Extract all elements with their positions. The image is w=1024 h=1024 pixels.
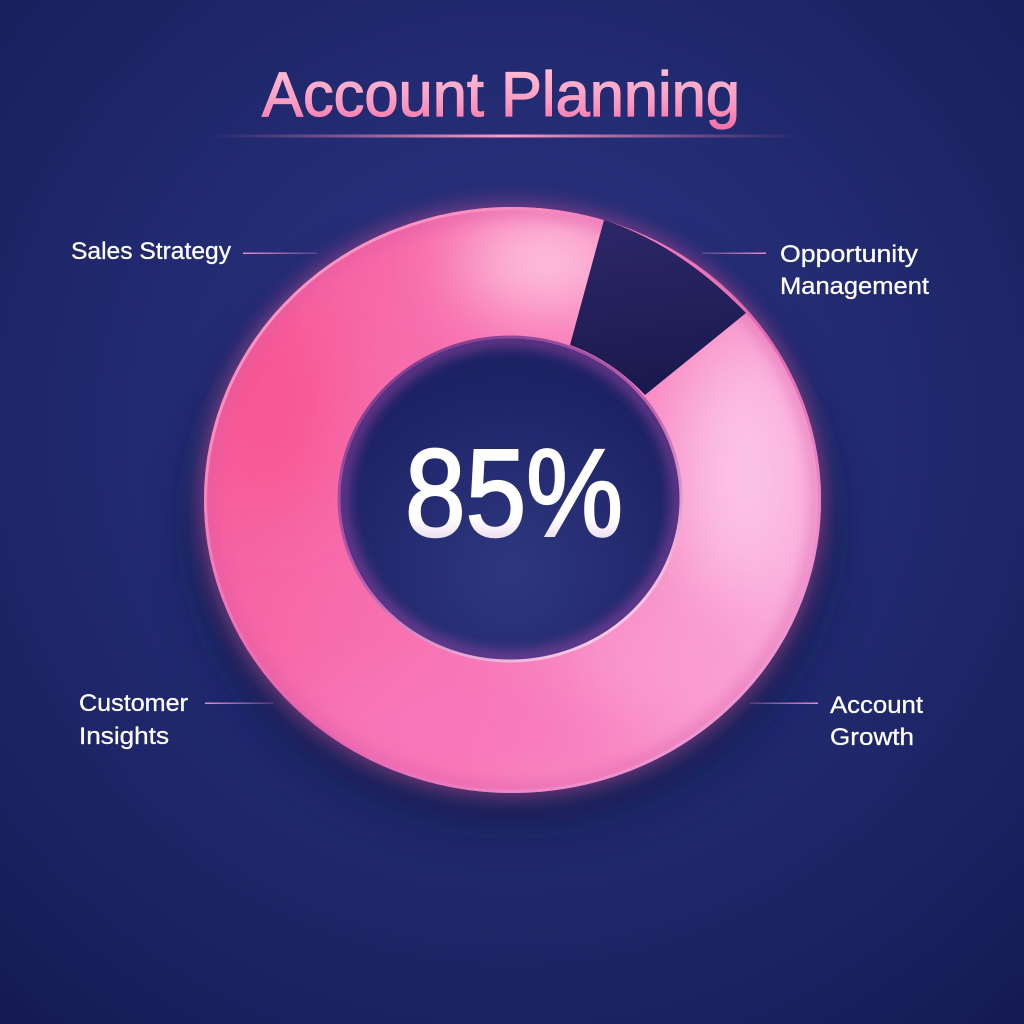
ring edge highlight xyxy=(206,208,820,792)
dark gap segment xyxy=(570,220,746,395)
ring segments xyxy=(204,207,821,793)
label: account growth xyxy=(750,692,923,751)
ring glow xyxy=(200,203,824,797)
label: opportunity management xyxy=(702,241,929,300)
donut chart xyxy=(190,203,834,825)
label: account growth: Account xyxy=(830,692,923,719)
title: Account Planning xyxy=(262,60,740,130)
label: customer insights xyxy=(79,690,273,750)
center hole xyxy=(339,337,681,661)
label: opportunity management: Management xyxy=(780,273,929,300)
ring shadow xyxy=(190,225,834,825)
label: opportunity management: Opportunity xyxy=(780,241,919,268)
label: account growth: Growth xyxy=(830,724,914,751)
label: sales strategy: Sales Strategy xyxy=(71,238,232,265)
percentage: 85% xyxy=(405,425,623,563)
label: customer insights: Customer xyxy=(79,690,188,717)
label: customer insights: Insights xyxy=(79,723,169,750)
